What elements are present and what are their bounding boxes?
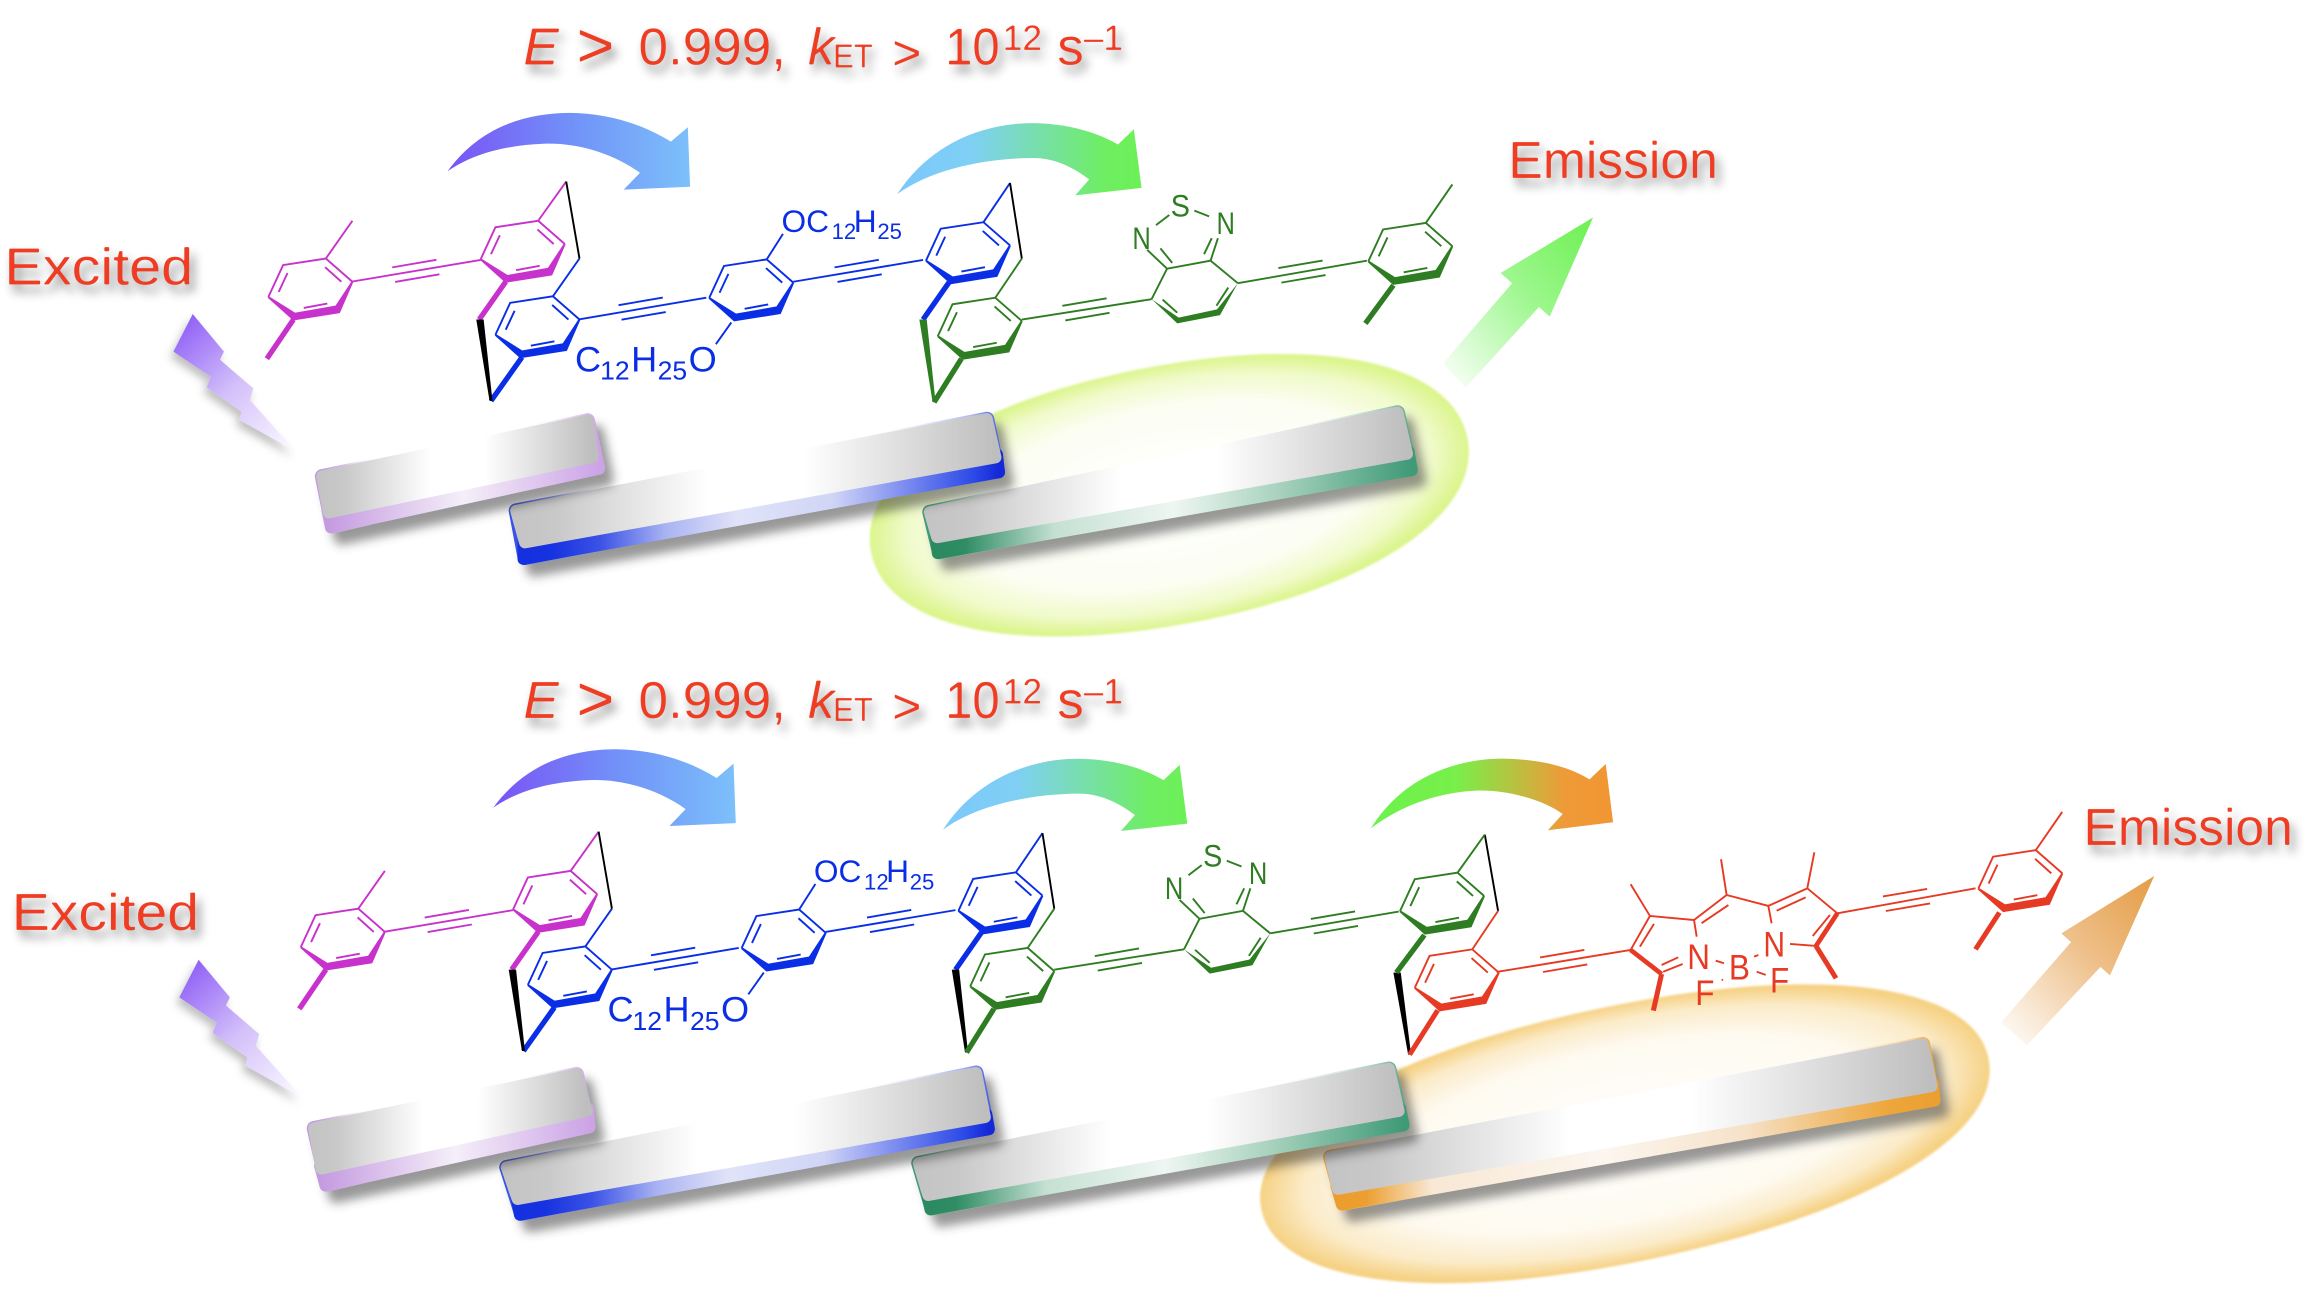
blue segment: O — [721, 990, 749, 1030]
arrow: blue to green energy transfer — [943, 759, 1187, 831]
heading: efficiency and rate: 10 — [945, 18, 1000, 76]
purple segment — [267, 182, 566, 359]
molecule: bottom energy-transfer chain — [299, 812, 2062, 1055]
label: Emission: Emission — [1508, 131, 1718, 190]
arrow: green to orange energy transfer — [1371, 759, 1613, 830]
heading: efficiency and rate: k — [808, 671, 837, 730]
blue segment: 12 — [864, 870, 889, 894]
label: Excited: Excited — [4, 238, 193, 297]
heading: efficiency and rate: > — [892, 25, 921, 80]
heading: efficiency and rate: > — [892, 678, 921, 734]
heading: efficiency and rate: 0.999, — [638, 18, 786, 76]
bar: green module — [930, 412, 1419, 564]
heading: efficiency and rate: ET — [833, 692, 873, 729]
green segment: S — [1171, 189, 1190, 223]
green segment — [967, 835, 1485, 1052]
blue segment: 12 — [600, 356, 630, 386]
blue segment: 25 — [658, 356, 687, 386]
blue segment — [523, 833, 1042, 1051]
blue segment: H — [664, 990, 690, 1030]
emission glow: orange — [1234, 933, 2015, 1290]
heading: efficiency and rate: 12 — [1003, 19, 1042, 58]
heading: efficiency and rate: s — [1057, 671, 1084, 730]
blue segment: 25 — [877, 219, 902, 244]
black linkers — [476, 182, 1022, 401]
blue segment: H — [631, 340, 657, 379]
bar: purple module — [322, 420, 606, 538]
blue segment: 25 — [690, 1006, 720, 1036]
black linkers — [509, 832, 1498, 1055]
bar: purple module — [314, 1074, 597, 1196]
bar: green module — [919, 1069, 1411, 1220]
green segment — [919, 184, 1452, 402]
red segment: BODIPY: F — [1770, 962, 1789, 1001]
heading: efficiency and rate: –1 — [1084, 673, 1123, 712]
green segment: N — [1132, 221, 1151, 256]
arrow: purple to blue energy transfer — [493, 749, 736, 826]
icon: excitation lightning bolt — [179, 960, 301, 1096]
panel: bottom cascade — [12, 663, 2293, 1290]
arrow: blue to green energy transfer — [897, 123, 1142, 195]
red segment: BODIPY: F — [1695, 974, 1714, 1013]
green segment: S — [1203, 839, 1222, 873]
blue segment: 25 — [910, 870, 934, 894]
panel: top cascade — [4, 9, 1718, 679]
blue segment: OC — [814, 854, 861, 889]
icon: excitation lightning bolt — [173, 314, 295, 451]
green segment: N — [1216, 206, 1235, 241]
heading: efficiency and rate: 10 — [945, 671, 1000, 730]
blue segment: C — [607, 990, 634, 1030]
bar: blue module — [516, 419, 1006, 569]
arrow: orange emission — [2001, 876, 2154, 1045]
arrow: purple to blue energy transfer — [448, 113, 690, 190]
blue segment: 12 — [832, 219, 856, 244]
label: Excited: Excited — [12, 884, 199, 942]
heading: efficiency and rate: s — [1057, 18, 1084, 76]
green segment: N — [1165, 871, 1183, 906]
arrow: green emission — [1443, 218, 1593, 388]
blue segment: C — [575, 340, 601, 379]
heading: efficiency and rate: E — [523, 18, 560, 76]
heading: efficiency and rate: > — [577, 663, 614, 734]
red segment: BODIPY: N — [1687, 938, 1710, 977]
bar: orange module — [1330, 1044, 1942, 1215]
blue segment: 12 — [633, 1006, 662, 1036]
molecule: top energy-transfer chain — [267, 182, 1452, 402]
red segment: BODIPY: N — [1763, 926, 1785, 965]
heading: efficiency and rate: 0.999, — [638, 671, 786, 730]
label: Emission: Emission — [2083, 799, 2293, 857]
bar: blue module — [507, 1073, 996, 1225]
heading: efficiency and rate: E — [523, 671, 560, 730]
heading: efficiency and rate: ET — [833, 39, 873, 76]
blue segment: OC — [781, 204, 829, 239]
heading: efficiency and rate: 12 — [1003, 673, 1042, 712]
red segment: BODIPY: B — [1729, 948, 1750, 987]
emission glow: green — [846, 311, 1492, 679]
blue segment: H — [886, 854, 909, 889]
blue segment — [491, 183, 1010, 401]
purple segment — [299, 832, 599, 1009]
green segment: N — [1249, 856, 1267, 891]
red segment: BODIPY — [1410, 812, 2062, 1055]
heading: efficiency and rate: > — [577, 9, 614, 81]
heading: efficiency and rate: –1 — [1084, 19, 1123, 58]
blue segment: O — [689, 340, 717, 379]
heading: efficiency and rate: k — [808, 18, 837, 76]
blue segment: H — [854, 204, 877, 239]
